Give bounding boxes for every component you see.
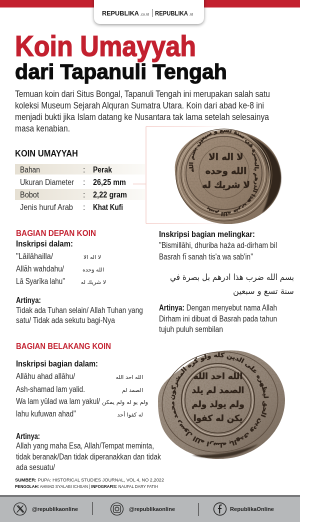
spec table: Perak [93, 166, 113, 174]
meaning: tujuh puluh sembilan [159, 325, 223, 334]
logo tab: REPUBLIKA [155, 12, 189, 18]
meaning: Artinya: Dengan menyebut nama Allah [159, 304, 277, 312]
arabic text: ولم يو له ولم يمكن [102, 399, 148, 406]
arabic text [81, 255, 106, 286]
transliteration [159, 241, 277, 262]
title: Koin Umayyah [15, 31, 196, 63]
intro paragraph: menjadi bukti jika Islam datang ke Nusantara tak lama setelah selesainya [15, 112, 269, 122]
arabic text: له كفوا أحد [117, 411, 143, 419]
meaning: tidak beranak/Dan tidak diperanakkan dan tidak [16, 453, 161, 462]
arabic text: الله وحده [82, 268, 104, 274]
spec table: : [83, 203, 85, 212]
spec table: Jenis huruf Arab [20, 203, 74, 212]
transliteration: "Bismillāhi, dhuriba haża ad-dirham bil [159, 241, 277, 250]
handle: x: @republikaonline [32, 507, 78, 513]
footer [0, 495, 300, 522]
heading: BAGIAN DEPAN KOIN [16, 228, 96, 238]
title [15, 31, 227, 84]
arabic text: سنة تسع و سبعين [233, 287, 294, 297]
logo tab: .id [189, 13, 193, 17]
coin: back [158, 350, 285, 459]
top red bar [0, 0, 300, 8]
coin back inscription: الصمد لم يلد [192, 386, 244, 396]
arabic text [102, 375, 148, 419]
icon: x [14, 503, 26, 515]
spec table: 2,22 gram [93, 190, 127, 200]
coin front inscription: الله وحده [205, 167, 247, 177]
transliteration [16, 252, 65, 286]
source credits: SUMBER: PUPA: HISTORICAL STUDIES JOURNAL, VOL 4, NO 2,2022 [15, 478, 165, 482]
arabic text: الصمد لم [122, 388, 143, 394]
intro paragraph [15, 89, 270, 134]
spec table: Bahan [20, 166, 40, 174]
coin back inscription: الله احد الله [193, 372, 243, 382]
coin back inscription: ولم يولد ولم [192, 400, 244, 410]
logo tab: REPUBLIKA [102, 12, 140, 18]
heading: koin umayyah: KOIN UMAYYAH [15, 148, 78, 158]
coin back inscription: يكن له كفوا [193, 414, 243, 424]
meaning: Artinya: [16, 432, 40, 441]
source credits: PENGOLAH: AHMAD SYALABI ICHSAN | INFOGRAFIS: NAUFAL DARY FATIH [15, 484, 158, 489]
transliteration: Ash-shamad lam yalid. [16, 385, 85, 394]
logo tab [94, 0, 204, 25]
meaning: Artinya: [16, 296, 41, 305]
heading: BAGIAN BELAKANG KOIN [16, 341, 111, 351]
handle: facebook: RepublikaOnline [230, 507, 274, 513]
spec table: Bobot [20, 190, 40, 200]
coin front inscription [202, 153, 250, 191]
spec table [15, 164, 145, 212]
spec table: Khat Kufi [93, 203, 123, 212]
meaning: Tidak ada Tuhan selain/ Allah Tuhan yang [16, 306, 143, 315]
section: bagian belakang koin [16, 341, 161, 472]
meaning [159, 304, 277, 334]
meaning: ada sesuatu/ [16, 463, 56, 472]
coin: front [174, 128, 282, 224]
subheading: Inskripsi dalam: [16, 239, 73, 249]
intro paragraph: koleksi Museum Sejarah Alquran Sumatra Utara. Koin dari abad ke-8 ini [15, 100, 264, 110]
transliteration: "Lāilāhailla/ [16, 252, 54, 261]
icon: facebook [214, 503, 226, 515]
coin front inscription: لا اله الا [209, 153, 243, 163]
spec table: : [83, 190, 85, 200]
coin front legend: بسم الله ضرب هذا الدرهم بالبصرة في سنة تسع و سبعين بسم الله [188, 130, 259, 216]
transliteration: Allāh wahdahu/ [16, 265, 65, 274]
spec table: : [83, 178, 85, 187]
source credits [15, 478, 165, 489]
intro paragraph: Temuan koin dari Situs Bongal, Tapanuli Tengah ini merupakan salah satu [15, 89, 270, 99]
meaning [16, 432, 161, 472]
arabic text: الله احد الله [116, 375, 143, 381]
transliteration: Lā Syarīka lahu" [16, 277, 65, 286]
meaning [16, 296, 143, 325]
section: inskripsi melingkar [159, 229, 294, 334]
handle: instagram: @republikaonline [129, 507, 175, 513]
subheading: Inskripsi bagian melingkar: [159, 229, 255, 239]
transliteration: Allāhu ahad allāhu/ [16, 372, 76, 381]
spec table: Ukuran Diameter [20, 178, 74, 187]
transliteration: lahu kufuwan ahad" [16, 410, 76, 419]
title: dari Tapanuli Tengah [15, 60, 227, 84]
meaning: satu/ Tidak ada sekutu bagi-Nya [16, 316, 116, 325]
meaning: Allah yang maha Esa, Allah/Tempat meminta, [16, 442, 154, 451]
intro paragraph: masa kenabian. [15, 124, 70, 134]
arabic text: لا شريك له [81, 280, 106, 286]
transliteration: Wa lam yūlad wa lam yakul/ [16, 397, 101, 406]
spec table: 26,25 mm [93, 178, 126, 187]
coin callout frame [133, 126, 226, 224]
transliteration: Basrah fī sanah tis'a wa sab'in" [159, 252, 253, 262]
coin front inscription: لا شريك له [202, 181, 250, 191]
subheading: Inskripsi bagian dalam: [16, 359, 98, 369]
coin back inscription [192, 372, 244, 424]
coin back legend: محمد رسول الله ارسله بالهدى ودين الحق ليظهره على الدين كله ولو كره المشركون [171, 352, 269, 448]
logo tab: .co.id [140, 13, 149, 17]
spec table: : [83, 166, 85, 174]
section: bagian depan koin [16, 228, 143, 325]
arabic text: لا اله الا [84, 255, 101, 261]
transliteration [16, 372, 101, 419]
icon: instagram [111, 503, 123, 515]
meaning: Dirham ini dibuat di Basrah pada tahun [159, 314, 277, 324]
arabic text [170, 273, 294, 297]
